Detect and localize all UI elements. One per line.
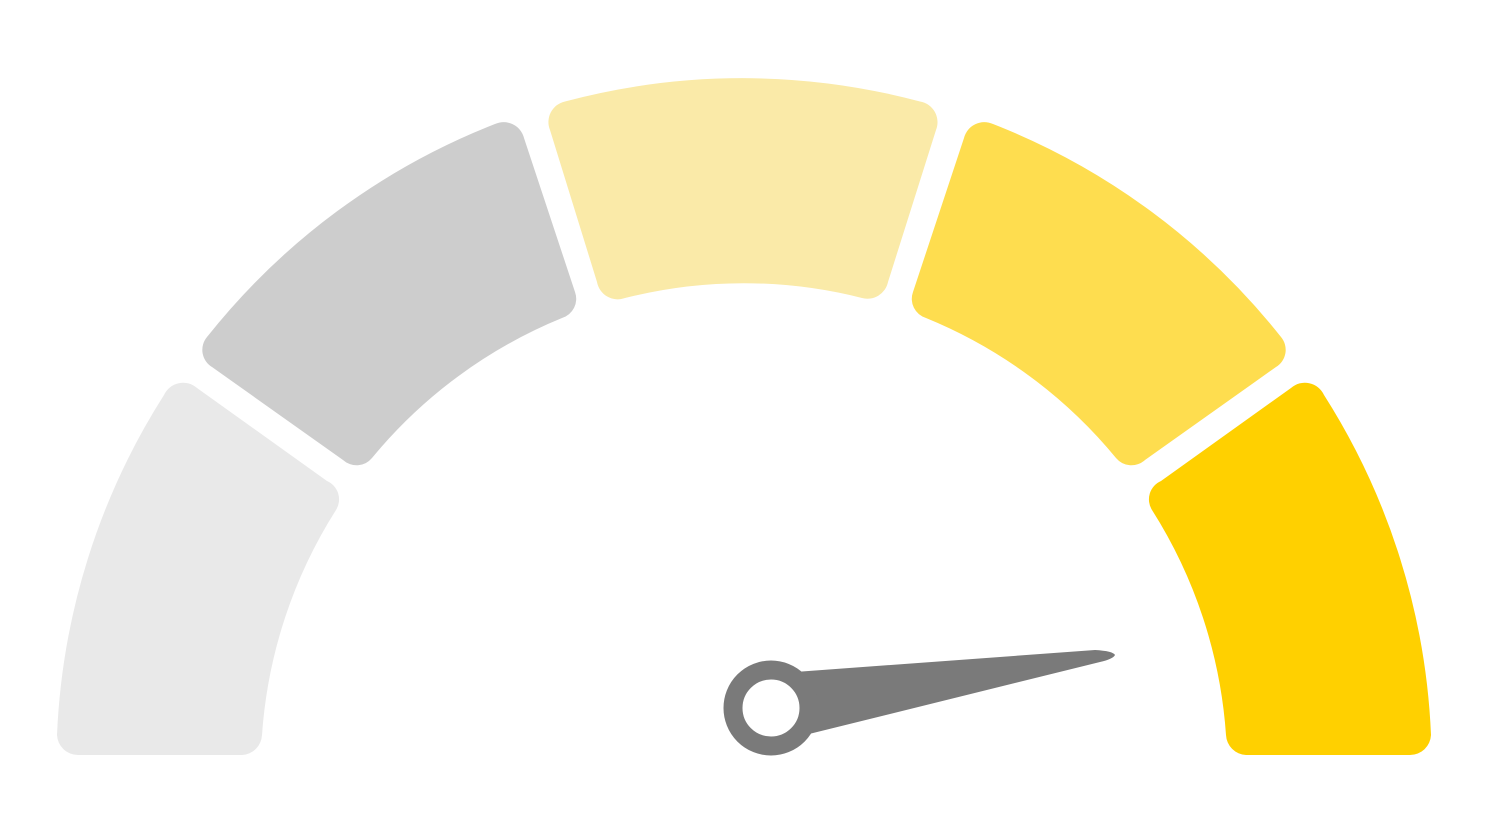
- segment 2: mid gray: [202, 122, 576, 465]
- segment 5: saturated yellow: [1149, 383, 1431, 755]
- gauge needle: [733, 650, 1115, 746]
- needle hub: [733, 670, 809, 746]
- segment 1: light gray: [57, 383, 339, 755]
- segment 3: pale yellow: [548, 78, 937, 299]
- needle pointer: [795, 650, 1115, 735]
- segment 4: medium yellow: [912, 122, 1286, 465]
